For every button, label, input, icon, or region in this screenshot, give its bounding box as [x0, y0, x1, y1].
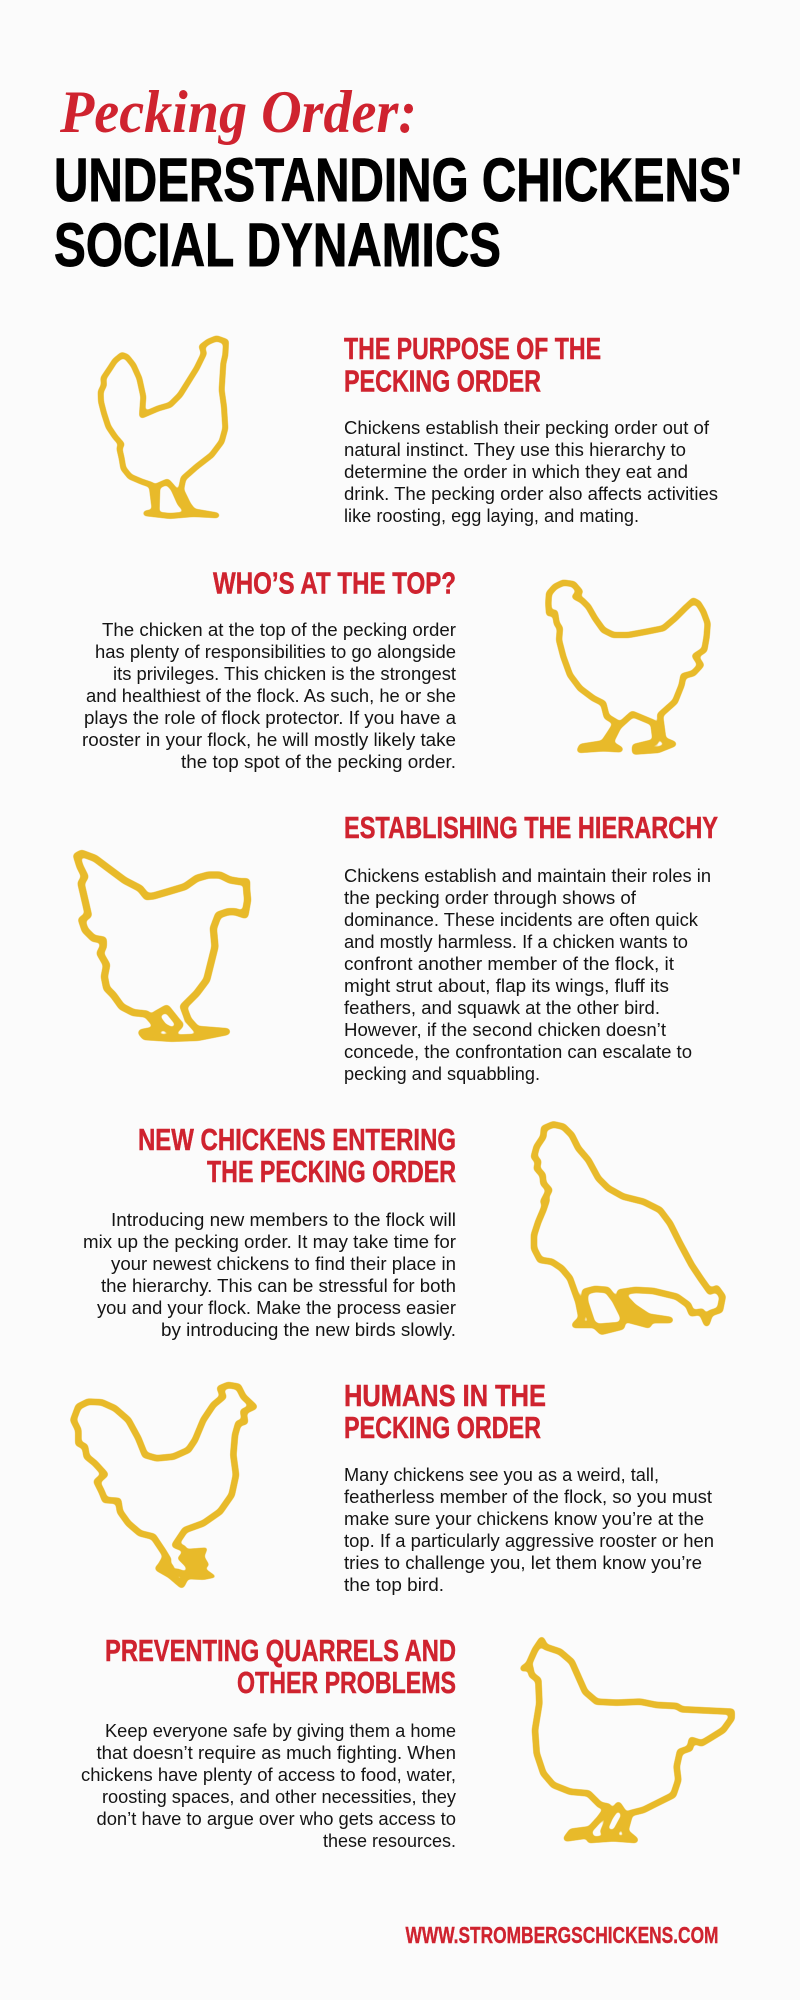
panel: preventing quarrels and other problems — [81, 1634, 732, 1851]
body text: the top spot of the pecking order. — [181, 752, 456, 772]
icon: chicken outline with flat tail, facing left — [523, 1640, 732, 1840]
body text: roosting spaces, and other necessities, they — [102, 1787, 456, 1807]
body text: dominance. These incidents are often quick — [344, 910, 699, 930]
body text: Chickens establish their pecking order out of — [344, 418, 710, 438]
body text: the top bird. — [344, 1575, 444, 1595]
body text: top. If a particularly aggressive rooster or hen — [344, 1531, 714, 1551]
body text: pecking and squabbling. — [344, 1064, 540, 1084]
icon: chicken outline standing, facing right — [101, 338, 226, 516]
body text: make sure your chickens know you’re at the — [344, 1509, 704, 1529]
icon: chicken outline walking, facing left — [548, 583, 708, 752]
icon: chicken outline hunched, facing right — [77, 853, 248, 1038]
heading: WHO’S AT THE TOP? — [213, 566, 456, 600]
body text: the pecking order through shows of — [344, 888, 637, 908]
body text: concede, the confrontation can escalate to — [344, 1042, 692, 1062]
heading: THE PURPOSE OF THE — [344, 332, 601, 366]
icon: chicken outline pecking the ground, facing right — [534, 1124, 723, 1332]
body text: might strut about, flap its wings, fluff its — [344, 976, 669, 996]
body text — [344, 866, 711, 1084]
heading — [344, 332, 601, 398]
body text: like roosting, egg laying, and mating. — [344, 506, 639, 526]
heading — [344, 1379, 546, 1445]
title: script line: Pecking Order: — [59, 79, 417, 145]
panel: who's at the top — [82, 566, 708, 772]
body text: tries to challenge you, let them know you’re — [344, 1553, 702, 1573]
body text — [82, 620, 457, 772]
heading — [138, 1123, 456, 1189]
body text: plays the role of flock protector. If you have a — [84, 708, 457, 728]
heading: PECKING ORDER — [344, 364, 541, 398]
body text: and mostly harmless. If a chicken wants to — [344, 932, 688, 952]
heading: THE PECKING ORDER — [207, 1155, 456, 1189]
panel: new chickens entering the pecking order — [83, 1123, 723, 1340]
icon: rooster outline, facing right — [73, 1385, 254, 1585]
heading: OTHER PROBLEMS — [237, 1666, 456, 1700]
body text — [344, 1465, 714, 1595]
body text: mix up the pecking order. It may take time for — [83, 1232, 456, 1252]
panel: humans in the pecking order — [73, 1379, 714, 1595]
body text: that doesn’t require as much fighting. When — [96, 1743, 456, 1763]
title: main line two: SOCIAL DYNAMICS — [54, 211, 501, 279]
body text: Chickens establish and maintain their roles in — [344, 866, 711, 886]
body text — [81, 1721, 456, 1851]
body text — [344, 418, 718, 526]
body text: Introducing new members to the flock will — [111, 1210, 456, 1230]
title block — [54, 79, 742, 279]
heading: HUMANS IN THE — [344, 1379, 546, 1413]
body text: your newest chickens to find their place in — [111, 1254, 456, 1274]
body text: The chicken at the top of the pecking order — [102, 620, 456, 640]
body text: However, if the second chicken doesn’t — [344, 1020, 666, 1040]
body text: chickens have plenty of access to food, water, — [81, 1765, 456, 1785]
body text — [83, 1210, 456, 1340]
body text: determine the order in which they eat and — [344, 462, 688, 482]
body text: these resources. — [323, 1831, 456, 1851]
body text: the hierarchy. This can be stressful for both — [101, 1276, 456, 1296]
body text: feathers, and squawk at the other bird. — [344, 998, 660, 1018]
body text: natural instinct. They use this hierarchy to — [344, 440, 686, 460]
heading: NEW CHICKENS ENTERING — [138, 1123, 456, 1157]
heading — [105, 1634, 456, 1700]
body text: Keep everyone safe by giving them a home — [105, 1721, 456, 1741]
body text: rooster in your flock, he will mostly likely take — [82, 730, 456, 750]
body text: its privileges. This chicken is the strongest — [113, 664, 456, 684]
body text: you and your flock. Make the process easier — [97, 1298, 456, 1318]
body text: has plenty of responsibilities to go alongside — [95, 642, 456, 662]
body text: and healthiest of the flock. As such, he or she — [86, 686, 456, 706]
heading: PREVENTING QUARRELS AND — [105, 1634, 456, 1668]
heading: PECKING ORDER — [344, 1411, 541, 1445]
body text: Many chickens see you as a weird, tall, — [344, 1465, 659, 1485]
panel: establishing the hierarchy — [77, 811, 718, 1084]
body text: don’t have to argue over who gets access to — [96, 1809, 456, 1829]
body text: by introducing the new birds slowly. — [161, 1320, 456, 1340]
body text: featherless member of the flock, so you must — [344, 1487, 712, 1507]
body text: confront another member of the flock, it — [344, 954, 674, 974]
body text: drink. The pecking order also affects activities — [344, 484, 718, 504]
panel: the purpose of the pecking order — [101, 332, 718, 526]
